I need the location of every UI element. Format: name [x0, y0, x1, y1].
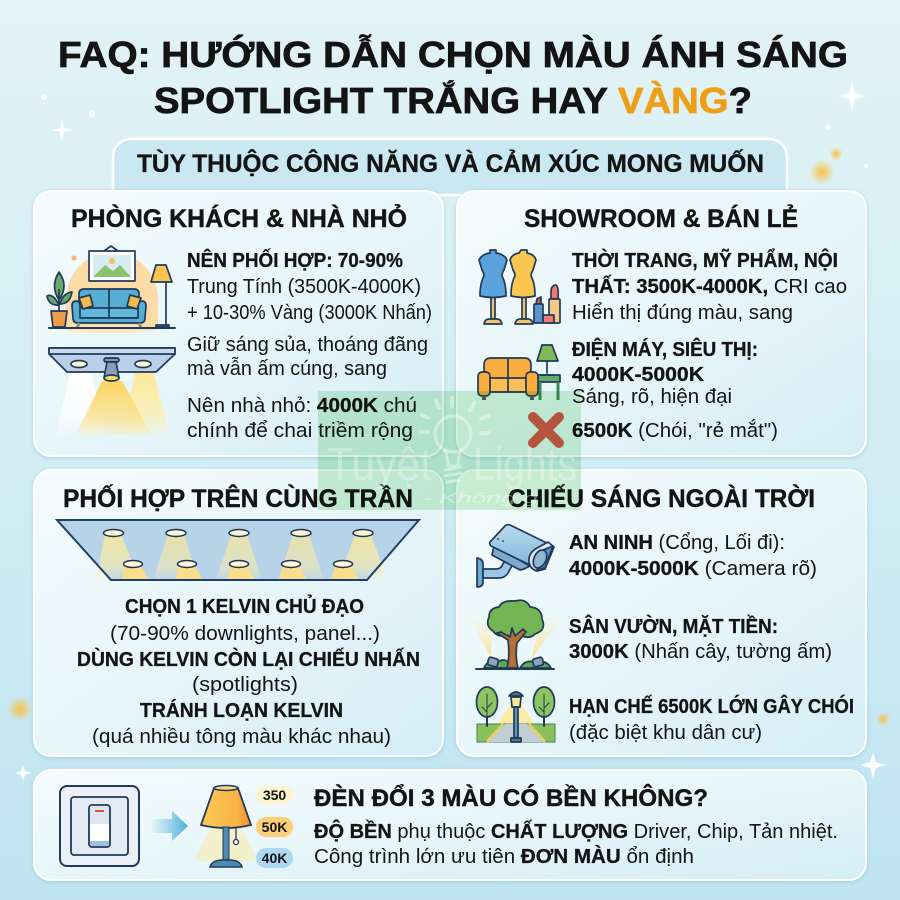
- watermark: [318, 391, 581, 510]
- heading: same ceiling: PHỐI HỢP TRÊN CÙNG TRẦN: [63, 483, 413, 513]
- text: outdoor advice: [569, 532, 854, 744]
- icon: ceiling spotlights: [49, 348, 175, 435]
- icon: red cross: [533, 417, 559, 443]
- subtitle tab: [113, 139, 787, 195]
- icon: path with street lamp: [476, 687, 555, 742]
- text: ceiling guidance: (quá nhiều tông màu khác nhau): [92, 726, 391, 748]
- color temperature pills: 40K: [262, 850, 287, 866]
- text: outdoor advice: (đặc biệt khu dân cư): [569, 722, 762, 744]
- text: ceiling guidance: [77, 594, 420, 748]
- icon: orange sofa and lamp: [478, 345, 560, 400]
- icon: security camera: [477, 525, 554, 587]
- text: ceiling guidance: CHỌN 1 KELVIN CHỦ ĐẠO: [125, 594, 364, 618]
- icon: mannequins and cosmetics: [479, 250, 560, 324]
- arrow: [152, 811, 188, 841]
- panel: living room and small home: [34, 191, 443, 456]
- text: living room advice: Giữ sáng sủa, thoáng đãng: [187, 334, 428, 356]
- title: [58, 33, 848, 121]
- text: living room advice: NÊN PHỐI HỢP: 70-90%: [187, 248, 403, 272]
- text: outdoor advice: 3000K (Nhấn cây, tường ấm): [569, 641, 832, 663]
- text: ceiling guidance: TRÁNH LOẠN KELVIN: [140, 699, 343, 722]
- heading: outdoor: CHIẾU SÁNG NGOÀI TRỜI: [508, 483, 815, 513]
- panel: showroom and retail: [457, 191, 866, 456]
- text: durability answer: ĐỘ BỀN phụ thuộc CHẤT LƯỢNG Driver, Chip, Tản nhiệt.: [314, 819, 838, 843]
- color temperature pills: [256, 786, 293, 868]
- text: outdoor advice: HẠN CHẾ 6500K LỚN GÂY CHÓI: [569, 694, 854, 718]
- text: showroom advice: [572, 248, 847, 442]
- text: living room advice: chính để chai triềm rộng: [187, 420, 413, 442]
- text: showroom advice: Sáng, rõ, hiện đại: [572, 386, 732, 408]
- icon: tree with ground spots: [470, 600, 562, 669]
- icon: table lamp: [195, 786, 257, 867]
- text: living room advice: mà vẫn ấm cúng, sang: [187, 357, 387, 380]
- icon: wall switch: [60, 786, 139, 866]
- text: showroom advice: ĐIỆN MÁY, SIÊU THỊ:: [572, 337, 758, 361]
- text: ceiling guidance: (spotlights): [192, 674, 298, 696]
- text: showroom advice: 4000K-5000K: [572, 364, 705, 386]
- text: showroom advice: 6500K (Chói, "rẻ mắt"): [572, 419, 778, 442]
- text: durability answer: Công trình lớn ưu tiên ĐƠN MÀU ổn định: [314, 845, 694, 868]
- title: FAQ: HƯỚNG DẪN CHỌN MÀU ÁNH SÁNG: [58, 33, 848, 75]
- watermark: - Không g: [423, 490, 539, 507]
- text: ceiling guidance: DÙNG KELVIN CÒN LẠI CHIẾU NHẤN: [77, 647, 420, 671]
- text: ceiling guidance: (70-90% downlights, panel...): [110, 623, 380, 645]
- color temperature pills: 50K: [262, 819, 287, 835]
- text: durability answer: ĐÈN ĐỔI 3 MÀU CÓ BỀN KHÔNG?: [314, 784, 708, 812]
- icon: living room: [47, 246, 175, 333]
- heading: showroom: SHOWROOM & BÁN LẺ: [524, 203, 798, 233]
- subtitle tab: TÙY THUỘC CÔNG NĂNG VÀ CẢM XÚC MONG MUỐN: [137, 148, 764, 178]
- text: showroom advice: THỜI TRANG, MỸ PHẨM, NỘI: [572, 248, 838, 272]
- text: living room advice: Trung Tính (3500K-4000K): [187, 276, 421, 298]
- heading: living room: PHÒNG KHÁCH & NHÀ NHỎ: [71, 203, 407, 233]
- title: SPOTLIGHT TRẮNG HAY VÀNG?: [154, 79, 752, 121]
- panel: mixing on the same ceiling: [34, 470, 443, 756]
- text: living room advice: Nên nhà nhỏ: 4000K chú: [187, 395, 417, 417]
- text: showroom advice: THẤT: 3500K-4000K, CRI cao: [572, 275, 847, 298]
- text: outdoor advice: SÂN VƯỜN, MẶT TIỀN:: [569, 614, 778, 638]
- text: showroom advice: Hiển thị đúng màu, sang: [572, 302, 793, 324]
- text: living room advice: + 10-30% Vàng (3000K Nhấn): [187, 302, 432, 324]
- text: durability answer: [314, 784, 838, 868]
- ceiling diagram: [57, 520, 419, 580]
- panel: outdoor lighting: [457, 470, 866, 756]
- text: living room advice: [187, 248, 432, 442]
- panel: tunable lamp durability: [34, 770, 866, 880]
- color temperature pills: 350: [263, 787, 286, 803]
- text: outdoor advice: AN NINH (Cổng, Lối đi):: [569, 532, 785, 554]
- text: outdoor advice: 4000K-5000K (Camera rõ): [569, 558, 817, 580]
- watermark: Tuyệt: [327, 438, 432, 490]
- watermark: Lights: [473, 438, 577, 490]
